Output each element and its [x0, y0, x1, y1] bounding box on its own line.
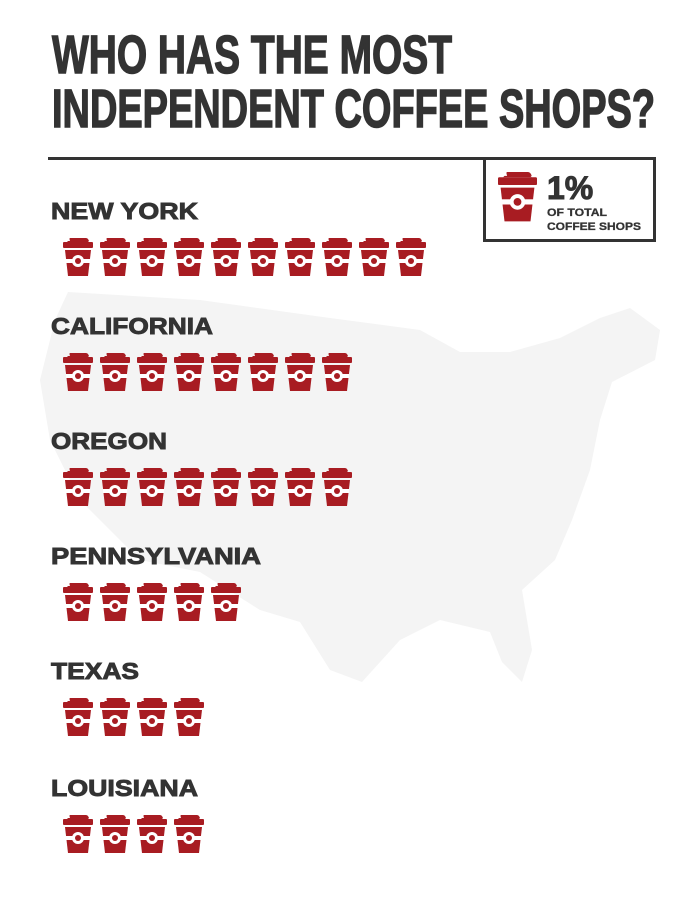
row: Oregon: [51, 428, 352, 506]
legend: 1%: [547, 170, 593, 206]
row: Pennsylvania: PENNSYLVANIA: [51, 543, 261, 569]
row: Texas: TEXAS: [51, 658, 139, 684]
title: WHO HAS THE MOST: [52, 25, 452, 85]
map background: [40, 292, 660, 682]
title: [52, 25, 655, 139]
row: Louisiana: LOUISIANA: [51, 775, 198, 801]
row: Oregon: OREGON: [51, 428, 167, 454]
row: Pennsylvania: [51, 543, 261, 621]
row: Louisiana: [51, 775, 204, 853]
row: New York: [51, 198, 426, 276]
legend: OF TOTAL: [547, 207, 607, 219]
row: California: [51, 313, 352, 391]
row: New York: NEW YORK: [51, 198, 198, 224]
row: California: CALIFORNIA: [51, 313, 213, 339]
row: Texas: [51, 658, 204, 736]
legend: [484, 158, 654, 240]
legend: COFFEE SHOPS: [547, 221, 641, 233]
